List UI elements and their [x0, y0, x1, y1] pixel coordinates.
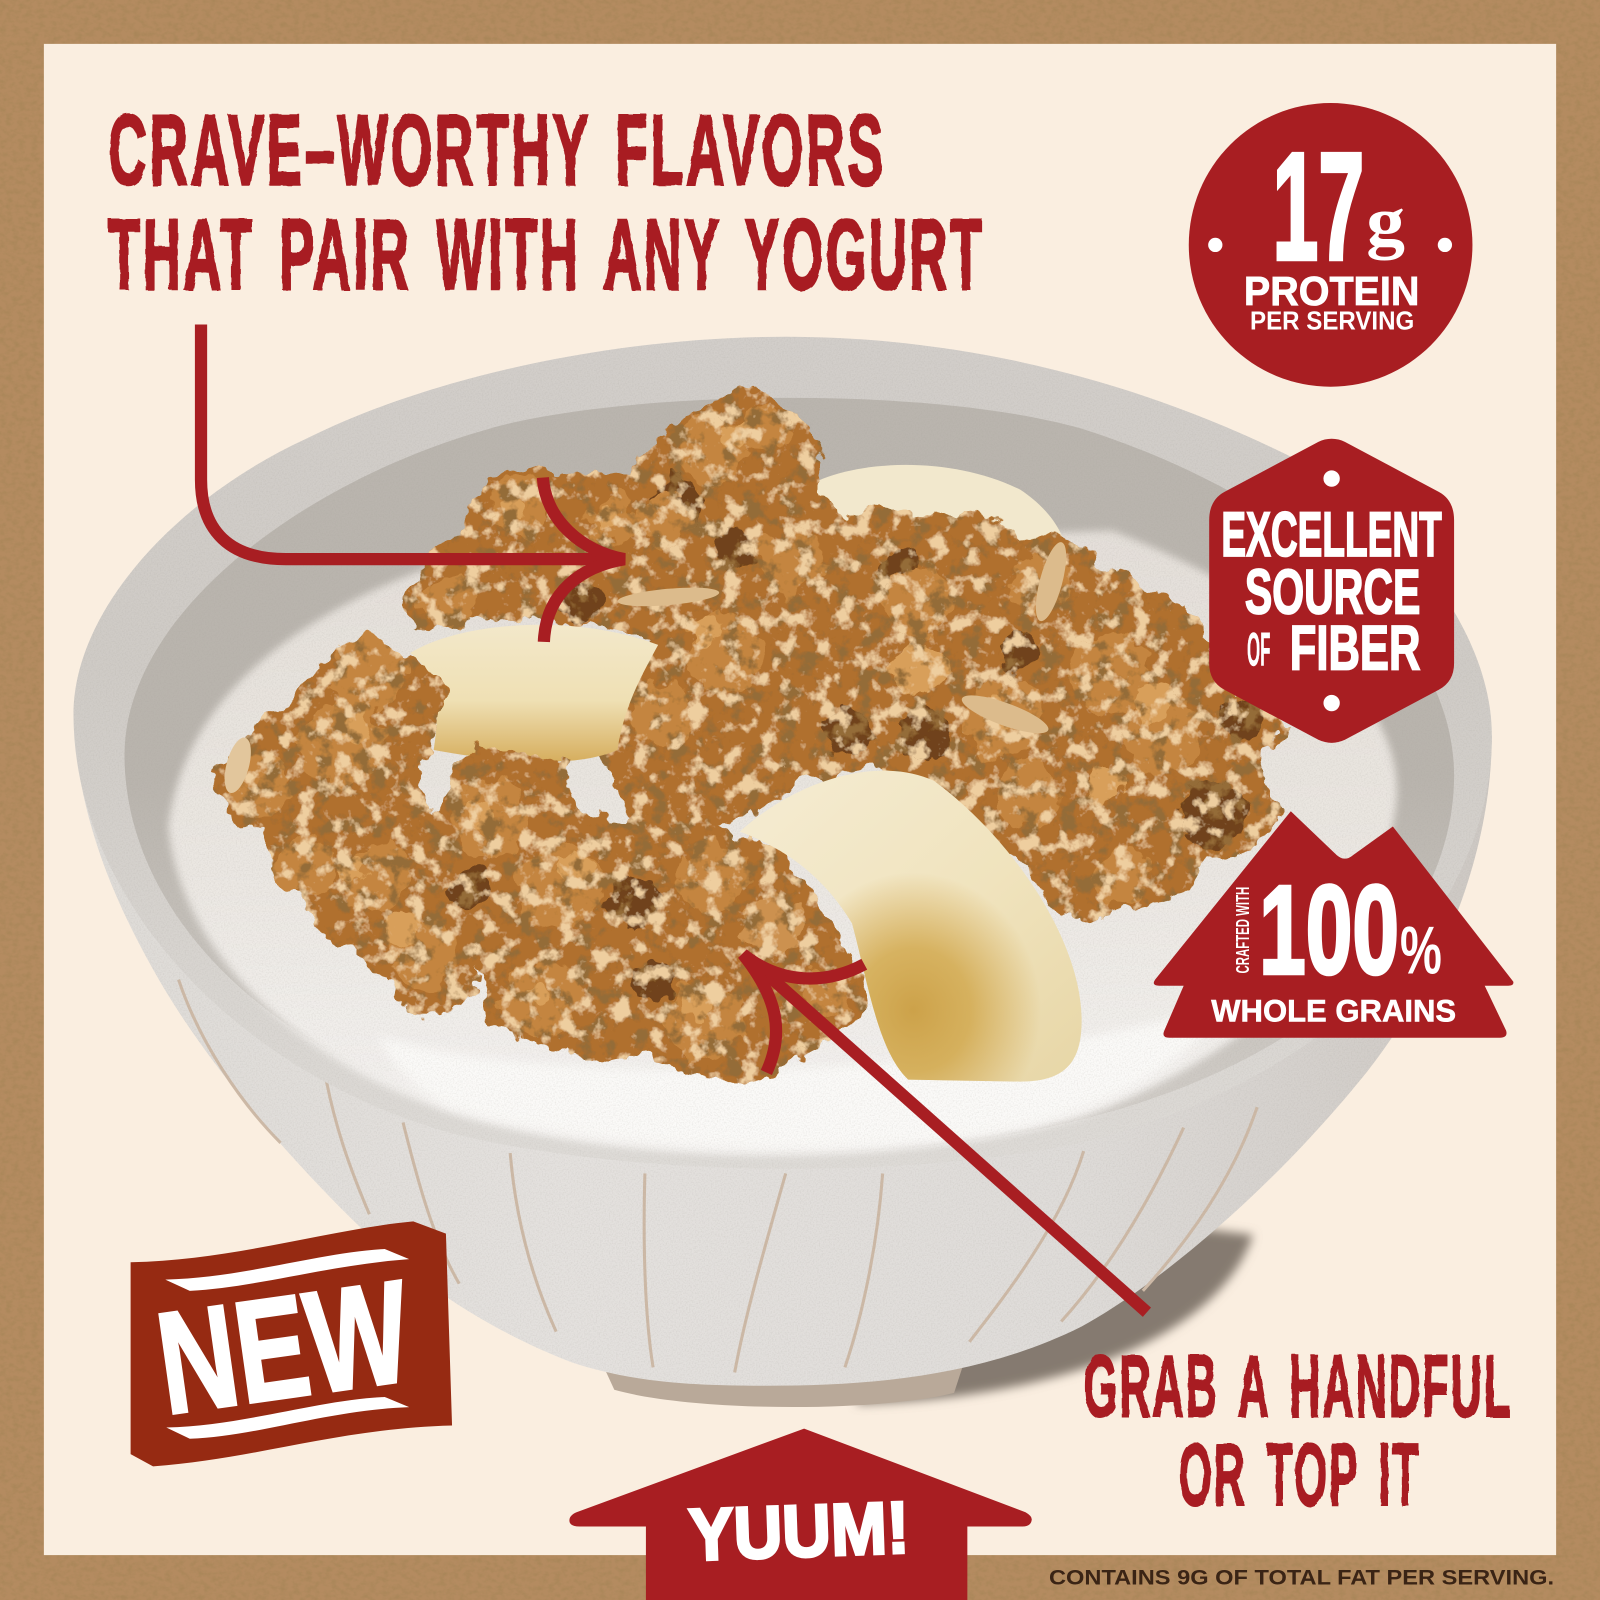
badge: 17g protein: PROTEIN — [1244, 268, 1419, 314]
badge: 100% whole grains: WHOLE GRAINS — [1211, 992, 1456, 1028]
bowl with yogurt and granola — [73, 324, 1492, 1407]
granola: left cluster — [212, 635, 478, 1018]
yogurt — [168, 531, 1397, 1155]
yuum arrow: YUUM! — [687, 1486, 911, 1576]
badge: 100% whole grains: % — [1400, 913, 1442, 988]
banana slice: left — [410, 625, 658, 762]
granola lumps: top and right — [422, 404, 1262, 906]
footnote: CONTAINS 9G OF TOTAL FAT PER SERVING. — [1049, 1566, 1554, 1590]
bowl grain — [73, 337, 1492, 1386]
badge: 17g protein: 17 — [1272, 121, 1364, 292]
bowl base — [597, 1352, 967, 1407]
badge: excellent source of fiber: SOURCE — [1245, 557, 1420, 627]
new flag: NEW — [148, 1250, 419, 1445]
grab a handful callout — [1084, 1337, 1512, 1524]
granola: over banana — [735, 882, 867, 1056]
badge: excellent source of fiber: FIBER — [1290, 613, 1420, 683]
bowl exterior — [73, 714, 1492, 1386]
yogurt bright foreground — [378, 1005, 1224, 1148]
badge: 17g protein: PER SERVING — [1250, 308, 1414, 336]
badge: 100% whole grains: CRAFTED WITH — [1232, 887, 1253, 973]
badge: 17g protein: g — [1366, 182, 1405, 261]
badge: excellent source of fiber: OF — [1247, 623, 1270, 675]
oat flakes — [617, 539, 1072, 741]
badge: 100% whole grains: 100 — [1259, 858, 1399, 1000]
bowl cast shadow — [857, 1219, 1253, 1404]
heading — [108, 95, 985, 311]
badge: excellent source of fiber — [1209, 439, 1454, 743]
arrow: grab a handful pointer — [743, 954, 1147, 1312]
yuum arrow — [569, 1429, 1032, 1600]
arrow: crave-worthy flavors pointer — [201, 324, 624, 642]
oat flake: left cluster — [220, 735, 256, 796]
granola: center cluster — [413, 745, 867, 1078]
bowl inner wall — [124, 398, 1454, 1153]
heading: CRAVE–WORTHY FLAVORS — [108, 95, 886, 207]
badge: 17g protein — [1189, 103, 1472, 387]
bowl exterior ridges — [179, 980, 1257, 1372]
badge: 100% whole grains — [1154, 811, 1513, 1038]
granola: top and right base — [403, 386, 1291, 917]
banana slice: front — [740, 770, 1082, 1082]
badge: excellent source of fiber: EXCELLENT — [1221, 500, 1442, 570]
banana slice: top — [801, 465, 1066, 571]
bowl rim — [73, 337, 1492, 1169]
